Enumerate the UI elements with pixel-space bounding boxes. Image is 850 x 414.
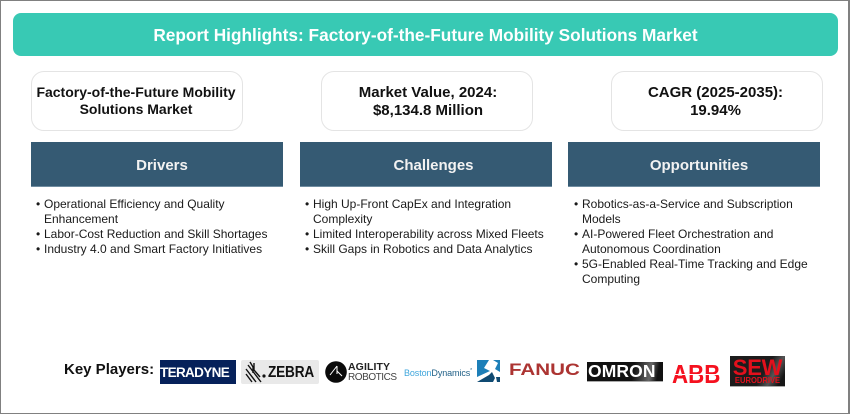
info box: market name: Factory-of-the-Future Mobility — [36, 84, 236, 100]
list: challenges: Skill Gaps in Robotics and Data Analytics — [313, 242, 532, 256]
info box: CAGR — [611, 71, 823, 131]
logo: Agility Robotics: AGILITY — [348, 361, 390, 373]
list: challenges: Complexity — [313, 212, 372, 226]
logo: Zebra — [241, 360, 319, 384]
list: challenges: High Up-Front CapEx and Integration — [313, 197, 511, 211]
list: opportunities: Models — [582, 212, 621, 226]
heading: challenges: Challenges — [393, 157, 474, 174]
heading: opportunities: Opportunities — [650, 157, 748, 174]
info box: CAGR: CAGR (2025-2035): — [648, 84, 783, 101]
heading: challenges — [300, 142, 552, 187]
logo: Boston Dynamics — [404, 360, 500, 382]
list: drivers: Industry 4.0 and Smart Factory Initiatives — [44, 242, 262, 256]
logo: SEW Eurodrive — [730, 356, 785, 387]
heading: drivers: Drivers — [136, 157, 188, 174]
logo: Teradyne — [160, 360, 236, 384]
list: drivers: Enhancement — [44, 212, 118, 226]
logo: Agility Robotics — [325, 361, 397, 383]
info box: market value: $8,134.8 Million — [373, 102, 483, 119]
icon: agility circle — [325, 361, 347, 383]
info box: market value — [321, 71, 533, 131]
info box: market name — [31, 71, 243, 131]
title banner — [13, 13, 838, 56]
list: drivers: Labor-Cost Reduction and Skill Shortages — [44, 227, 267, 241]
key players label: Key Players: — [64, 361, 154, 378]
heading: drivers — [31, 142, 283, 187]
list: opportunities: 5G-Enabled Real-Time Tracking and Edge — [582, 257, 808, 271]
logo: Agility Robotics: ROBOTICS — [348, 372, 397, 383]
info box: market value: Market Value, 2024: — [359, 84, 497, 101]
info box: CAGR: 19.94% — [690, 102, 741, 119]
logo: Zebra: ZEBRA — [268, 364, 314, 381]
list: opportunities: Computing — [582, 272, 640, 286]
heading: opportunities — [568, 142, 820, 187]
list: opportunities: AI-Powered Fleet Orchestration and — [582, 227, 773, 241]
icon: boston dynamics mark — [477, 360, 500, 382]
list: drivers — [36, 197, 268, 256]
list: challenges — [306, 197, 544, 256]
icon: zebra stripes — [246, 362, 266, 382]
logo: Teradyne: TERADYNE — [160, 365, 229, 380]
list: opportunities: Autonomous Coordination — [582, 242, 721, 256]
list: opportunities — [574, 197, 808, 286]
title banner: Report Highlights: Factory-of-the-Future Mobility Solutions Market — [153, 25, 698, 45]
logo: SEW Eurodrive: EURODRIVE — [735, 376, 780, 385]
list: challenges: Limited Interoperability across Mixed Fleets — [313, 227, 544, 241]
info box: market name: Solutions Market — [80, 101, 192, 117]
list: opportunities: Robotics-as-a-Service and Subscription — [582, 197, 793, 211]
logo: Boston Dynamics: BostonDynamics* — [404, 368, 472, 378]
logo: Fanuc: FANUC — [509, 360, 580, 379]
list: drivers: Operational Efficiency and Quality — [44, 197, 225, 211]
